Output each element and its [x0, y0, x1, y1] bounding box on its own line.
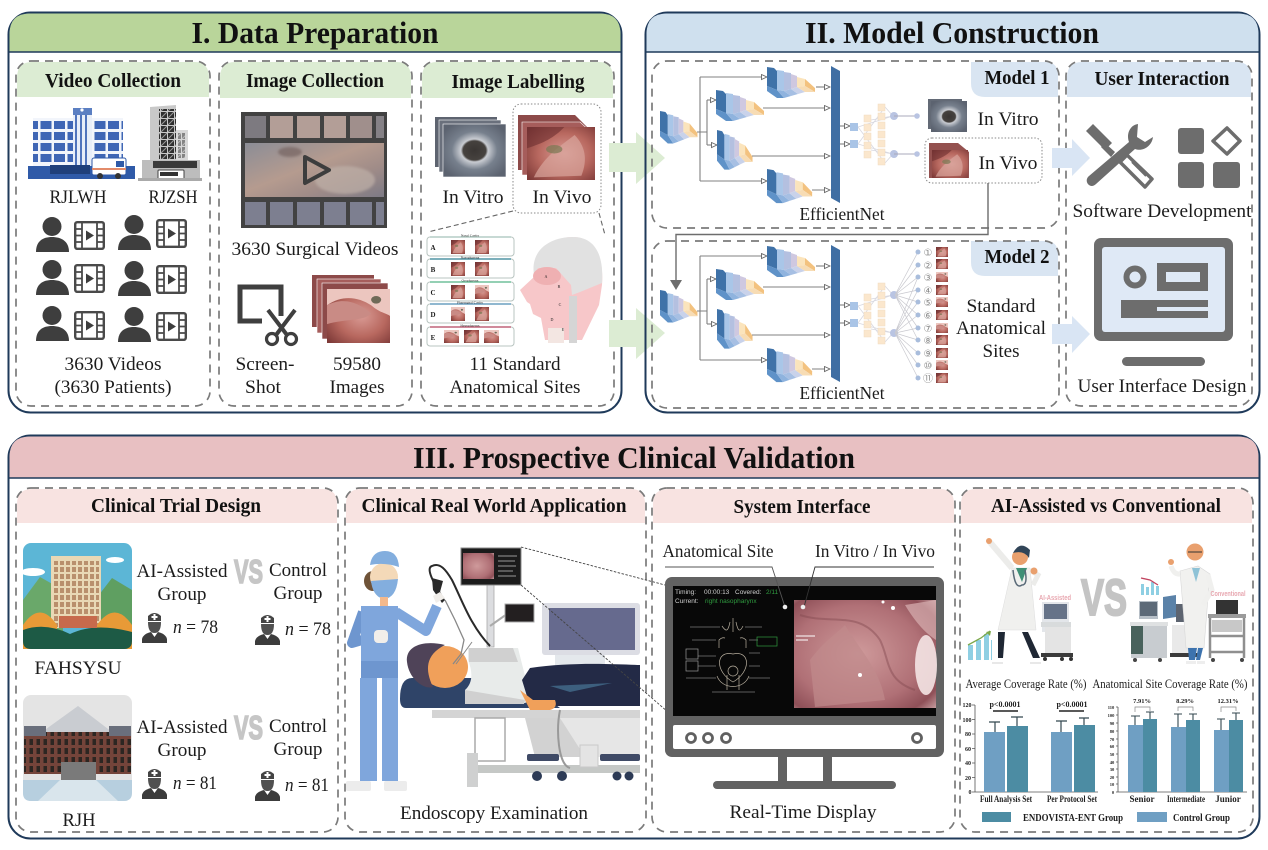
arrow: in vivo to model 2: [670, 183, 988, 290]
bar chart: anatomical site coverage rate: 20: [1110, 775, 1115, 780]
label: In Vivo: In Vivo: [978, 153, 1038, 174]
text: standard anatomical sites: Anatomical: [956, 318, 1046, 339]
text: standard anatomical sites: Sites: [982, 341, 1020, 362]
comparison: RJH groups: n = 81: [285, 775, 329, 796]
callout box: in vivo output: [925, 138, 1042, 183]
panel: III. Prospective Clinical Validation: [8, 436, 1260, 838]
status readout: Covered:: [735, 589, 762, 596]
illustration: conventional doctor: Conventional: [1210, 591, 1246, 598]
output fan: eleven classes: ①: [924, 248, 932, 259]
output fan: eleven classes: ⑨: [924, 349, 932, 360]
icon: video film strip: [241, 112, 387, 228]
bar chart: anatomical site coverage rate: 60: [1110, 744, 1115, 749]
panel: Image Labelling: [421, 61, 614, 406]
label: In Vivo: In Vivo: [532, 187, 592, 208]
panel: Clinical Trial Design: [16, 488, 338, 832]
arrow: labelling to model 1: [609, 132, 665, 184]
bar chart: average coverage rate: 60: [965, 747, 971, 753]
heading: System Interface: System Interface: [734, 496, 871, 518]
comparison: FAHSYSU groups: Group: [274, 583, 322, 604]
thumbnail: in vivo: [929, 143, 969, 178]
icon grid: patients and videos: [36, 215, 186, 342]
illustration: head anatomy: C: [559, 302, 562, 307]
comparison: FAHSYSU groups: n = 78: [173, 617, 218, 638]
label: In Vitro / In Vivo: In Vitro / In Vivo: [815, 541, 935, 561]
heading: User Interaction: User Interaction: [1094, 68, 1230, 90]
icon: hospital RJLWH: [28, 108, 135, 179]
bar chart: anatomical site coverage rate: [1108, 698, 1247, 804]
comparison: RJH groups: Group: [158, 740, 206, 761]
status readout: Current:: [675, 598, 699, 605]
text: 3630 videos: [54, 354, 172, 398]
label: Real-Time Display: Real-Time Display: [730, 802, 877, 823]
illustration: head anatomy: B: [558, 284, 561, 289]
bar chart: average coverage rate: 100: [962, 718, 972, 724]
panel: Image Collection: [219, 61, 412, 406]
illustration: AI-assisted doctor: AI-Assisted: [1039, 595, 1071, 602]
illustration: head anatomy: [520, 237, 602, 343]
bar chart: anatomical site coverage rate: 30: [1110, 767, 1115, 772]
bar chart: anatomical site coverage rate: 80: [1110, 729, 1115, 734]
comparison: RJH groups: AI-Assisted: [136, 717, 228, 738]
leader: in vitro in vivo: [804, 567, 934, 607]
output fan: eleven classes: ⑤: [924, 298, 932, 309]
comparison: RJH groups: [136, 709, 329, 801]
cards: anatomical site examples A to E: D: [430, 311, 436, 319]
text: screenshot: Screen-: [236, 354, 294, 375]
label: EfficientNet: EfficientNet: [800, 383, 884, 403]
arrow: model 1 to software: [1052, 139, 1090, 176]
arrow: labelling to model 2: [609, 308, 665, 359]
icon: wrench and screwdriver: [1086, 124, 1153, 187]
text: 59580 images: 59580: [333, 354, 381, 375]
panel: User Interaction: [1066, 61, 1252, 406]
bar chart: average coverage rate: 80: [965, 732, 971, 738]
diagram: EfficientNet model 2: [660, 245, 898, 382]
bar chart: average coverage rate: Per Protocol Set: [1047, 794, 1097, 804]
panel: AI-Assisted vs Conventional: [960, 488, 1253, 832]
output fan: eleven classes: [895, 247, 948, 385]
label: FAHSYSU: FAHSYSU: [34, 658, 122, 679]
panel: Clinical Real World Application: [345, 488, 646, 832]
text: 11 standard anatomical sites: 11 Standard: [470, 354, 561, 375]
image stack: in vitro: [435, 117, 506, 177]
cards: anatomical site examples A to E: [427, 234, 514, 346]
illustration: AI-assisted doctor: [968, 538, 1073, 664]
illustration: endoscopy room: [346, 548, 640, 791]
bar chart: average coverage rate: 20: [965, 776, 971, 782]
text: 3630 surgical videos: 3630 Surgical Videos: [232, 239, 398, 260]
heading: Clinical Trial Design: Clinical Trial Design: [91, 495, 261, 517]
text: 11 standard anatomical sites: Anatomical Sites: [450, 377, 580, 398]
bar chart: anatomical site coverage rate: 40: [1110, 760, 1115, 765]
callout box: in vivo: [513, 104, 601, 213]
cards: anatomical site examples A to E: Pharyngeal Cavity: [457, 300, 483, 304]
bar chart: anatomical site coverage rate: 100: [1108, 713, 1115, 718]
illustration: conventional doctor: [1130, 544, 1246, 664]
diagram: EfficientNet model 1: [660, 66, 898, 203]
bar chart: anatomical site coverage rate: 50: [1110, 752, 1115, 757]
bar chart: anatomical site coverage rate: 0: [1112, 790, 1115, 795]
output nodes: [914, 113, 920, 157]
comparison: RJH groups: Control: [269, 716, 327, 737]
comparison: FAHSYSU groups: AI-Assisted: [136, 561, 228, 582]
panel: System Interface: [652, 488, 955, 832]
legend: ENDOVISTA-ENT Group: [1023, 813, 1123, 824]
image stack: in vivo: [518, 115, 595, 180]
cards: anatomical site examples A to E: A: [430, 244, 436, 252]
image stack: surgical frames: [312, 275, 390, 343]
icon: user interface monitor: [1094, 238, 1233, 366]
text: 59580 images: Images: [330, 377, 384, 398]
heading: I. Data Preparation: I. Data Preparation: [192, 15, 438, 50]
icon: screenshot scissors: [240, 287, 296, 344]
photo: RJH hospital: [23, 695, 132, 801]
heading: AI-Assisted vs Conventional: AI-Assisted vs Conventional: [991, 495, 1221, 517]
bar chart: anatomical site coverage rate: 7.91%: [1133, 698, 1151, 705]
output fan: eleven classes: ⑦: [924, 324, 932, 335]
heading: Clinical Real World Application: Clinical Real World Application: [362, 495, 626, 517]
bar chart: anatomical site coverage rate: 8.29%: [1176, 698, 1194, 705]
bar chart: average coverage rate: p<0.0001: [989, 700, 1021, 709]
bar chart: average coverage rate: Full Analysis Set: [980, 794, 1032, 804]
bar chart: average coverage rate: 40: [965, 761, 971, 767]
heading: III. Prospective Clinical Validation: III. Prospective Clinical Validation: [413, 440, 855, 475]
status readout: 00:00:13: [704, 589, 730, 596]
output fan: eleven classes: ⑩: [924, 361, 932, 372]
cards: anatomical site examples A to E: Hypopharynx: [460, 324, 480, 328]
bar chart: average coverage rate: 0: [968, 790, 972, 796]
panel: Video Collection: [16, 61, 210, 406]
comparison: RJH groups: Group: [274, 739, 322, 760]
bar chart: anatomical site coverage rate: Intermediate: [1167, 794, 1205, 804]
illustration: head anatomy: E: [562, 327, 565, 332]
arrow: model 2 to interface: [1052, 316, 1090, 353]
bar chart: anatomical site coverage rate: 110: [1108, 705, 1115, 710]
legend: Control Group: [1173, 813, 1230, 824]
status readout: right nasopharynx: [705, 598, 757, 605]
label: Endoscopy Examination: Endoscopy Examination: [400, 803, 588, 824]
thumbnail: in vitro: [928, 99, 967, 132]
text: standard anatomical sites: [956, 296, 1046, 362]
bar chart: average coverage rate: p<0.0001: [1056, 700, 1088, 709]
illustration: head anatomy: A: [545, 274, 548, 279]
output fan: eleven classes: ②: [924, 261, 932, 272]
heading: Image Labelling: Image Labelling: [452, 71, 584, 93]
text: screenshot: Shot: [245, 377, 282, 398]
label: Model 1: Model 1: [984, 67, 1050, 89]
chart title: Average Coverage Rate: Average Coverage Rate (%): [966, 676, 1086, 691]
endoscopic view: [794, 600, 937, 708]
output fan: eleven classes: ⑪: [923, 373, 933, 385]
label: RJH: RJH: [62, 810, 96, 831]
leader: anatomical site: [665, 567, 785, 607]
panel: Model 1: [652, 61, 1059, 228]
comparison: RJH groups: n = 81: [173, 773, 217, 794]
anatomical diagram: [686, 618, 777, 692]
comparison: FAHSYSU groups: Group: [158, 584, 206, 605]
icon: hospital RJZSH: [138, 105, 202, 181]
label: User Interface Design: User Interface Design: [1078, 376, 1247, 397]
status readout: [675, 589, 779, 605]
label: Anatomical Site: Anatomical Site: [662, 541, 774, 561]
illustration: head anatomy: D: [551, 317, 554, 322]
monitor: real-time system interface: [665, 577, 944, 789]
bar chart: average coverage rate: [962, 700, 1098, 804]
bar chart: anatomical site coverage rate: 12.31%: [1217, 698, 1239, 705]
text: 3630 videos: (3630 Patients): [54, 377, 172, 398]
panel: Model 2: [652, 241, 1059, 408]
cards: anatomical site examples A to E: B: [431, 266, 436, 274]
legend: [982, 812, 1230, 824]
cards: anatomical site examples A to E: E: [431, 334, 436, 342]
output fan: eleven classes: ⑥: [924, 311, 932, 322]
text: 3630 videos: 3630 Videos: [64, 354, 162, 375]
heading: Video Collection: Video Collection: [45, 70, 181, 92]
label: In Vitro: In Vitro: [978, 109, 1038, 130]
label: Model 2: Model 2: [984, 246, 1050, 268]
label: RJZSH: RJZSH: [148, 187, 198, 208]
status readout: Timing:: [675, 589, 696, 596]
label: RJLWH: RJLWH: [50, 187, 107, 208]
text: 59580 images: [330, 354, 384, 398]
VS badge: VS: [1081, 569, 1127, 626]
bar chart: anatomical site coverage rate: 70: [1110, 737, 1115, 742]
output fan: eleven classes: ④: [924, 286, 932, 297]
comparison: FAHSYSU groups: [136, 553, 331, 645]
icon: app grid: [1178, 128, 1240, 188]
bar chart: average coverage rate: 120: [962, 703, 972, 709]
cards: anatomical site examples A to E: Oropharynx: [462, 278, 479, 282]
bar chart: anatomical site coverage rate: Senior: [1129, 794, 1155, 804]
label: Software Development: Software Development: [1072, 201, 1252, 222]
output fan: eleven classes: ⑧: [924, 336, 932, 347]
cards: anatomical site examples A to E: Nasal Cavity: [461, 234, 479, 238]
comparison: FAHSYSU groups: Control: [269, 560, 327, 581]
heading: Image Collection: Image Collection: [246, 70, 384, 92]
cards: anatomical site examples A to E: Nasopharynx: [461, 256, 480, 260]
panel: II. Model Construction: [646, 12, 1260, 412]
label: In Vitro: In Vitro: [442, 187, 504, 208]
bar chart: anatomical site coverage rate: 10: [1110, 782, 1115, 787]
bar chart: anatomical site coverage rate: 90: [1110, 721, 1115, 726]
heading: II. Model Construction: II. Model Construction: [805, 15, 1099, 50]
comparison: FAHSYSU groups: n = 78: [285, 619, 331, 640]
bar chart: anatomical site coverage rate: Junior: [1215, 794, 1241, 804]
output fan: eleven classes: ③: [924, 273, 932, 284]
text: screenshot: [236, 354, 294, 398]
panel: I. Data Preparation: [8, 12, 622, 412]
text: standard anatomical sites: Standard: [966, 296, 1036, 317]
status readout: 2/11: [766, 589, 779, 596]
cards: anatomical site examples A to E: C: [430, 289, 436, 297]
label: EfficientNet: EfficientNet: [800, 204, 884, 224]
photo: FAHSYSU hospital: [21, 543, 132, 649]
text: 11 standard anatomical sites: [450, 354, 580, 398]
